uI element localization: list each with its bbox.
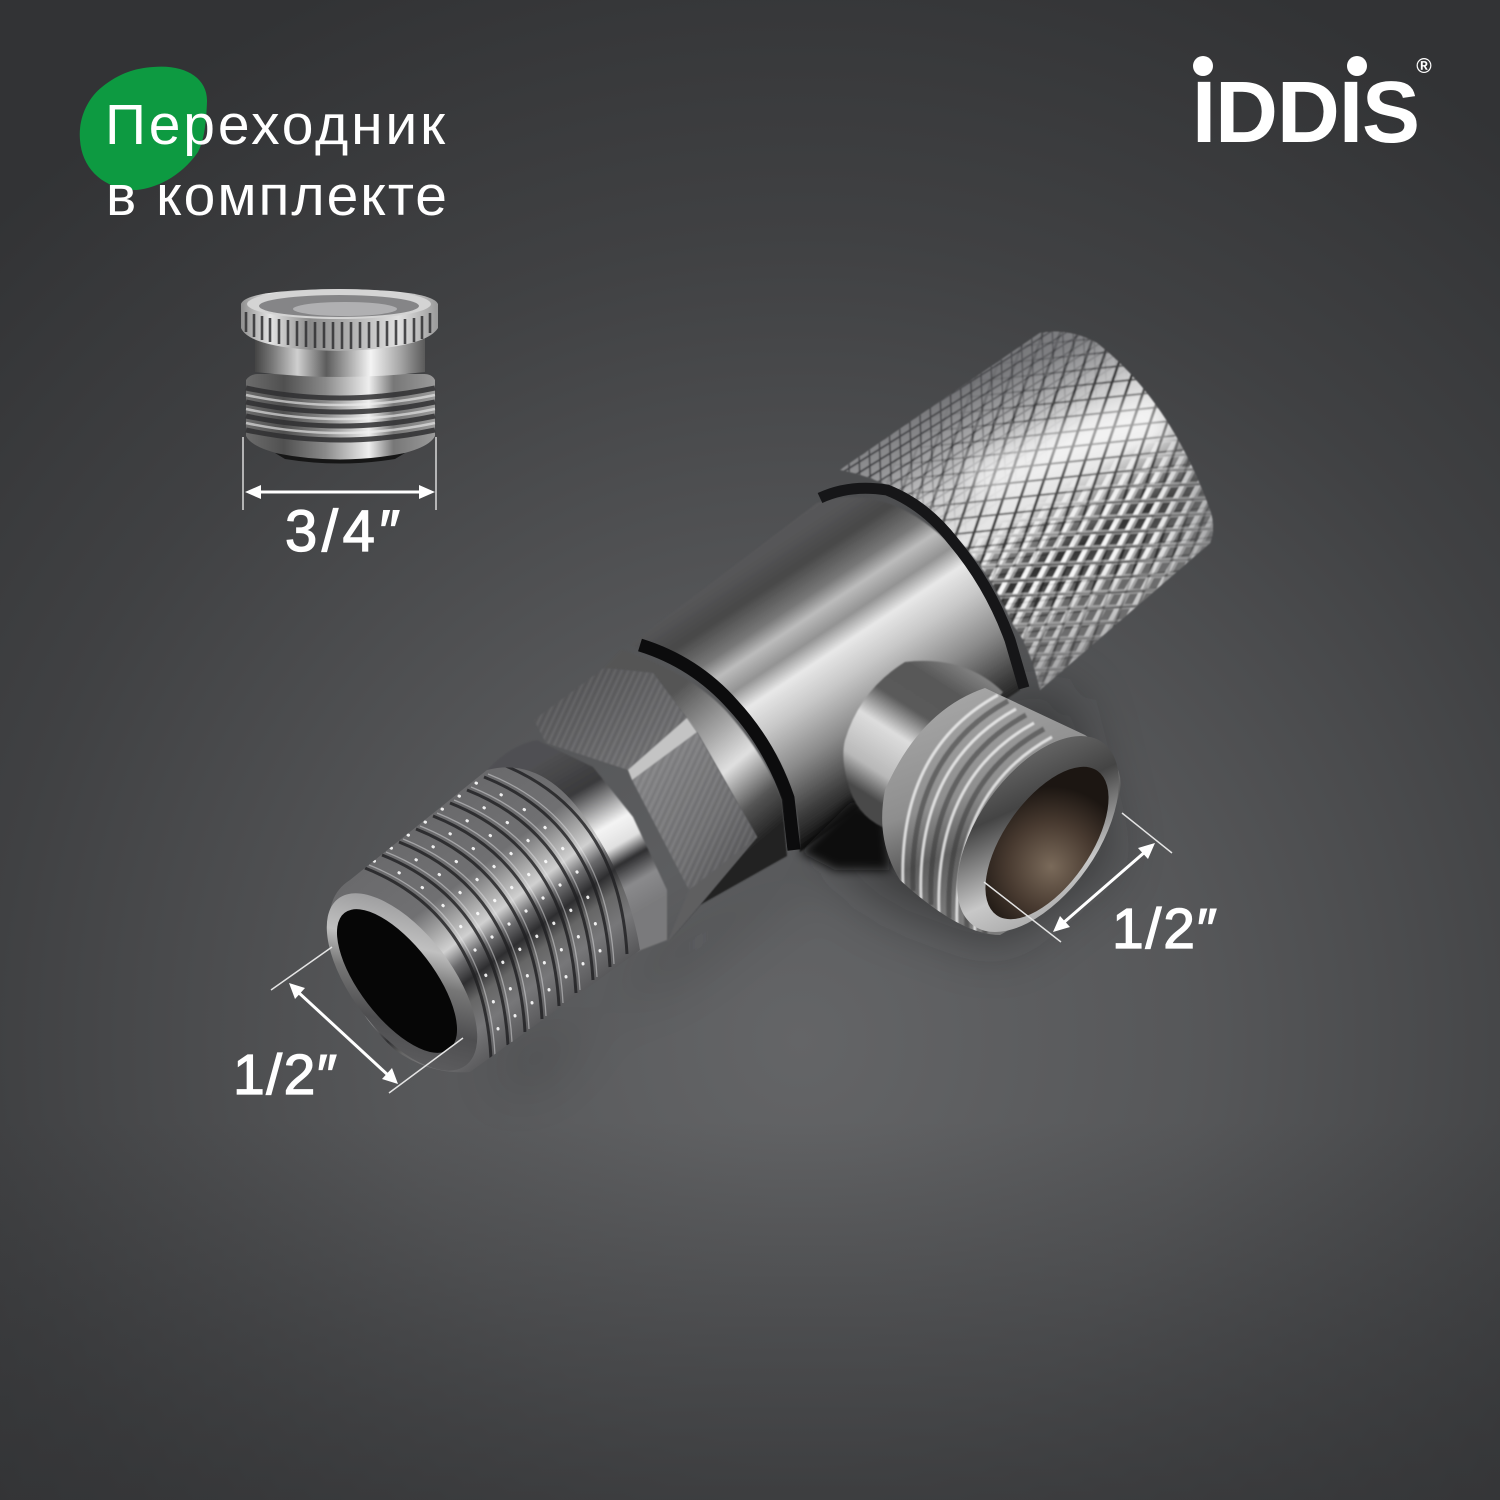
title [105, 93, 447, 228]
adapter neck [255, 336, 425, 377]
side outlet mouth [925, 708, 1151, 960]
main thread mouth [298, 868, 506, 1096]
knurled knob [840, 332, 1213, 690]
metal band between ring and hex [604, 650, 787, 943]
green accent blob [80, 67, 207, 190]
dark gap between body and knob [820, 488, 1024, 688]
valve body cylinder [630, 497, 1020, 852]
brand logo: IDDIS [1192, 64, 1420, 161]
dimension left 1/2 [233, 947, 463, 1107]
hex nut [534, 668, 757, 943]
dimension right 1/2: 1/2″ [1112, 897, 1217, 961]
dimension 3/4: 3/4″ [285, 499, 400, 564]
dimension 3/4 [243, 437, 436, 564]
thread ridges [365, 764, 627, 1058]
dimension right 1/2 [984, 813, 1217, 961]
knob specular highlight [960, 395, 1175, 505]
adapter 3/4 fitting [241, 289, 438, 464]
dimension left 1/2: 1/2″ [233, 1043, 337, 1107]
valve photo illustration [298, 332, 1213, 1096]
main threaded end [329, 764, 640, 1072]
side outlet threaded end [882, 688, 1121, 947]
title: Переходник [105, 93, 446, 157]
side thread ridges [900, 694, 1053, 934]
valve shadow [500, 690, 1110, 1080]
collar below hex [487, 740, 667, 953]
black seal ring [640, 645, 794, 850]
adapter knurled ring [241, 289, 438, 351]
adapter threaded part [246, 374, 435, 464]
brand logo: ® [1416, 55, 1432, 78]
side outlet neck [843, 661, 1003, 830]
title: в комплекте [106, 164, 447, 228]
shadow in T junction [800, 800, 890, 870]
